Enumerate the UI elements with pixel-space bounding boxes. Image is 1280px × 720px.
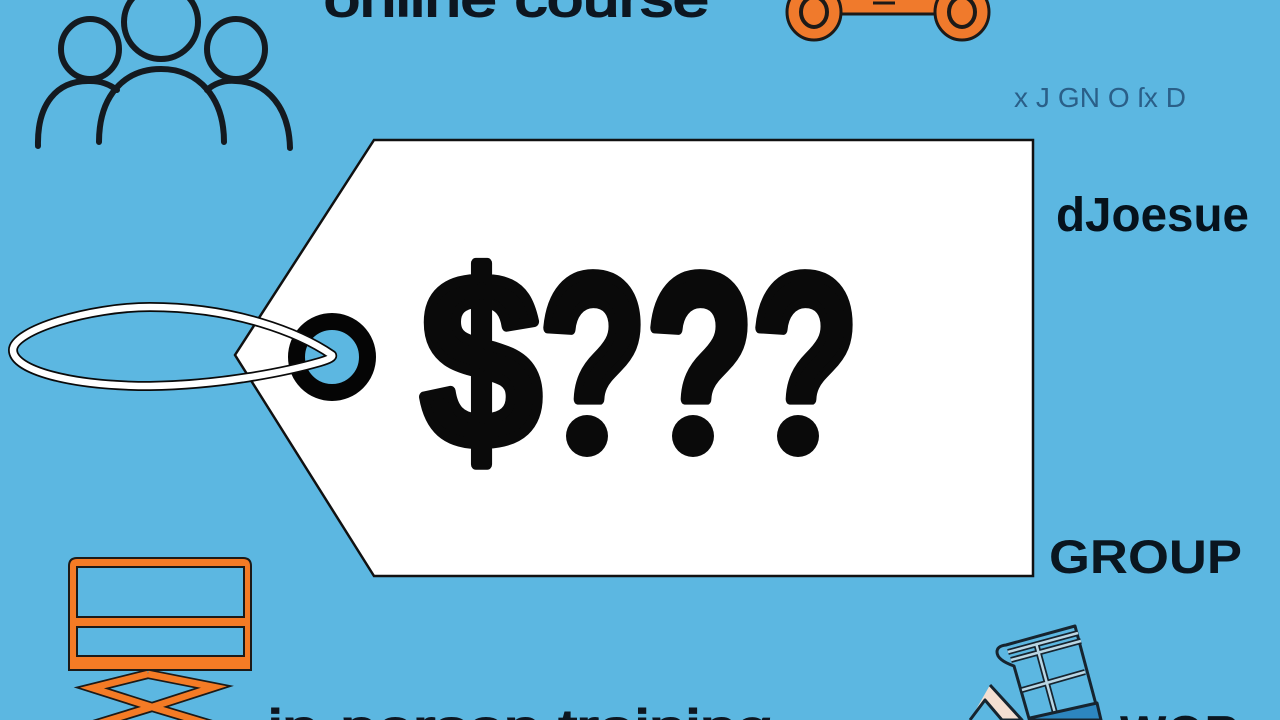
price text: [419, 258, 853, 470]
price text: $: [421, 224, 541, 499]
tag string loop: [13, 307, 332, 386]
icon: group of people: [38, 0, 290, 148]
icon: orange vehicle: [787, 0, 989, 40]
small garbled label: x J GN O ſx D: [1014, 82, 1186, 113]
price tag: [235, 140, 1033, 576]
icon: window-cleaning lift: [970, 626, 1101, 720]
label: doesue: dJoesue: [1056, 189, 1249, 242]
arm: [970, 685, 1022, 720]
icon: orange scissor lift: [69, 558, 251, 720]
price text: ?: [539, 222, 647, 506]
label: GROUP: GROUP: [1049, 530, 1242, 583]
tag hole ring: [296, 322, 368, 392]
price text: ?: [646, 222, 754, 506]
price text: ?: [751, 222, 859, 506]
